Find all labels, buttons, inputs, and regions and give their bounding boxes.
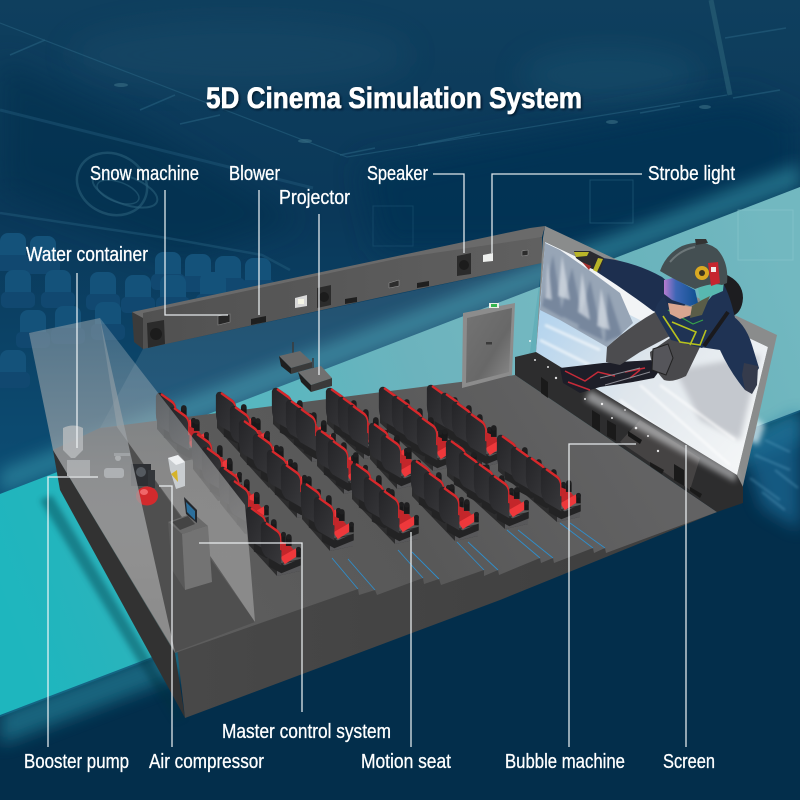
seats row F [427, 385, 581, 522]
equipment: electric box [168, 455, 185, 489]
water spray behind screen [742, 412, 800, 530]
strobe light [483, 253, 493, 262]
torso jacket [655, 283, 735, 348]
bulkhead with speakers and effect devices [132, 226, 545, 349]
vent right [522, 250, 528, 256]
front face of slab [175, 500, 717, 718]
snow spray along base [585, 390, 737, 482]
leader lines [48, 174, 686, 747]
title: 5D Cinema Simulation System [206, 82, 582, 115]
vent [389, 280, 399, 288]
vent [417, 281, 429, 288]
glass partition wall [100, 318, 255, 622]
raised arm [597, 258, 690, 318]
blower [251, 316, 266, 325]
boot binding [652, 344, 673, 375]
seats row D [326, 388, 479, 541]
monitor [184, 497, 197, 523]
speaker left [147, 320, 165, 348]
snowboard [560, 360, 660, 393]
labels [24, 163, 735, 773]
snow debris along base [529, 340, 659, 452]
label: snow machine: Snow machine [90, 163, 199, 185]
chin strap [690, 296, 710, 318]
snowboarder [560, 239, 759, 394]
goggles [664, 278, 724, 306]
left side slab [53, 450, 185, 718]
glove [574, 251, 604, 272]
projectors [279, 342, 332, 392]
speaker middle [317, 285, 331, 308]
seats row B [216, 392, 354, 551]
screen frame [536, 226, 777, 490]
exit sign [489, 303, 499, 308]
equipment: water container [63, 426, 90, 476]
seats row C [272, 388, 419, 544]
master control cabinet [168, 497, 212, 590]
equipment: booster pump [104, 453, 130, 478]
seats row A [156, 393, 301, 576]
room structure [53, 375, 717, 718]
legs [606, 311, 672, 365]
light left [295, 295, 307, 308]
label: screen: Screen [663, 751, 715, 773]
vent [345, 297, 357, 304]
label: water container: Water container [26, 244, 148, 266]
label: bubble machine: Bubble machine [505, 751, 625, 773]
step blue edge lines [332, 523, 605, 590]
seats row E [379, 387, 529, 529]
screen image: snow scene [536, 242, 768, 475]
equipment: air compressor [131, 464, 158, 506]
label: booster pump: Booster pump [24, 751, 129, 773]
label: strobe light: Strobe light [648, 163, 735, 185]
label: master control system: Master control system [222, 721, 391, 743]
projector rear [279, 342, 312, 374]
room shadow on background [40, 495, 185, 722]
glass back opening tint [100, 263, 542, 428]
right arm and glove [700, 300, 759, 390]
helmet [660, 239, 727, 289]
face [668, 303, 694, 319]
door [462, 303, 515, 388]
stepped floor [53, 375, 717, 653]
label: projector: Projector [279, 187, 350, 209]
label: air compressor: Air compressor [149, 751, 264, 773]
teal diagonal band [0, 163, 800, 745]
equipment room floor [53, 427, 255, 652]
projector front [298, 358, 332, 392]
label: blower: Blower [229, 163, 280, 185]
label: motion seat: Motion seat [361, 751, 451, 773]
speaker right [457, 253, 471, 276]
snow machine [218, 314, 230, 325]
label: speaker: Speaker [367, 163, 428, 185]
backpack [716, 274, 743, 317]
screen base with bubble machines [515, 352, 743, 512]
left outer glass wall [29, 318, 175, 652]
